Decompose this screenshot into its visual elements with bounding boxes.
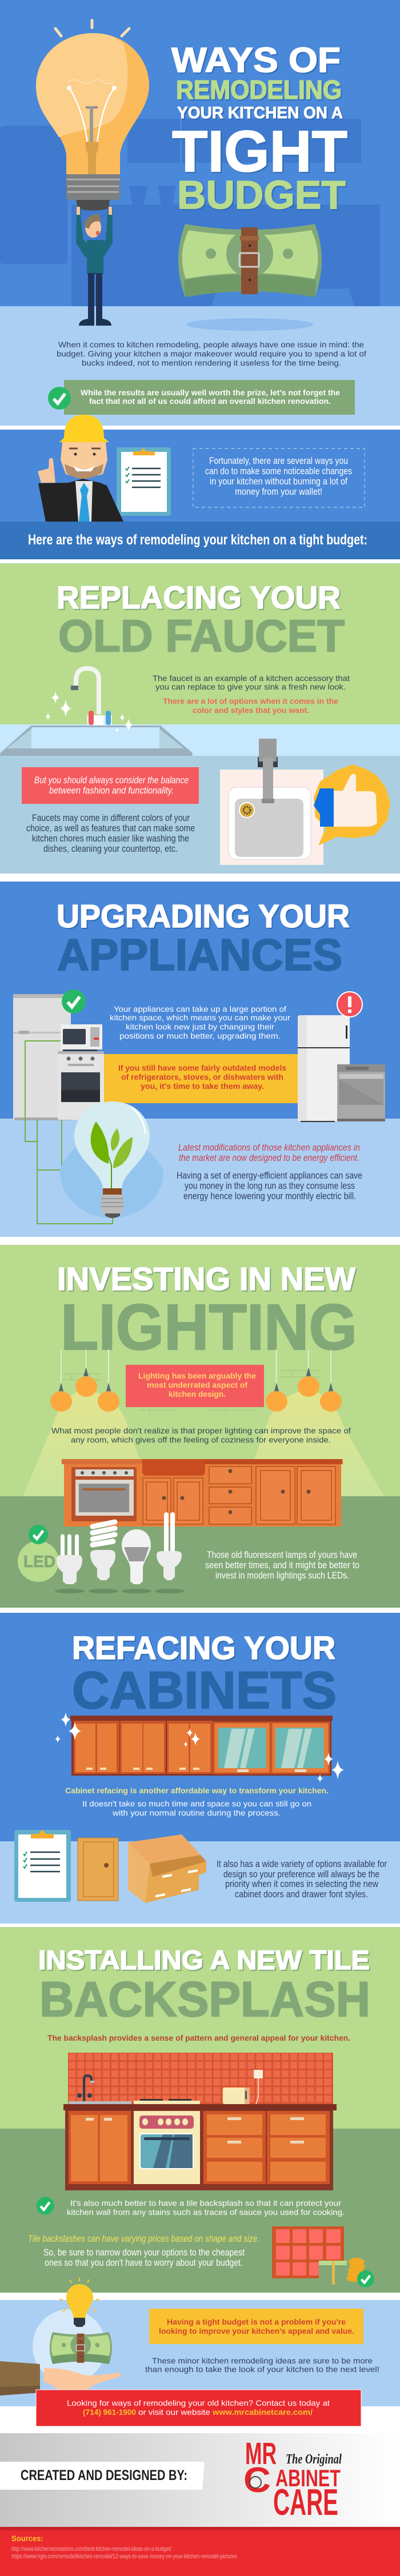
text: design options paragraph: cabinet doors and drawer font styles.: [235, 1889, 368, 1900]
callout: dashed note: in your kitchen without burning a lot of: [210, 476, 347, 487]
text: tile prices paragraph: ones so that you don't have to worry about your budget.: [45, 2258, 243, 2268]
text: LED paragraph: invest in modern lightings such LEDs.: [215, 1571, 349, 1581]
text: faucet paragraph: There are a lot of options when it comes in the: [163, 696, 338, 706]
callout: tight budget note: [149, 2309, 363, 2344]
icon: sparkles: [55, 1712, 344, 1783]
title: YOUR KITCHEN ON A: [177, 104, 343, 122]
heading: investing in new lighting: INVESTING IN NEW: [57, 1261, 355, 1297]
text: lighting paragraph: any room, which gives off the feeling of coziness for everyone inside.: [71, 1435, 331, 1444]
callout: contact box: or visit our website: [138, 2407, 210, 2417]
callout: tight budget note: looking to improve your kitchen's appeal and value.: [159, 2326, 354, 2335]
logo: Mr Cabinet Care: C: [243, 2461, 271, 2500]
icon: construction worker: [38, 415, 123, 522]
icon: top view sink: [220, 739, 323, 865]
icon: lower cabinets: [62, 1459, 343, 1527]
text: intro paragraph: bucks indeed, not to mention rendering it useless for the time being.: [82, 358, 341, 367]
callout: dashed note: Fortunately, there are several ways you: [209, 456, 348, 466]
logo: Mr Cabinet Care: ABINET: [275, 2465, 341, 2491]
callout: underrated lighting note: [126, 1365, 264, 1407]
icon: hand with bulb and money: [0, 2278, 121, 2395]
text: faucet features paragraph: Faucets may come in different colors of your: [32, 813, 190, 823]
text: created and designed by banner: [0, 2462, 205, 2490]
heading: upgrading your appliances: APPLIANCES: [57, 930, 342, 980]
icon: left fridge: [13, 994, 71, 1120]
title: TIGHT: [172, 119, 347, 184]
title: WAYS OF: [171, 41, 341, 79]
logo: Mr Cabinet Care: MR: [245, 2437, 277, 2471]
icon: faucet and sink: [0, 668, 193, 756]
text: faucet features paragraph: [26, 813, 195, 854]
text: conclusion paragraph: [145, 2356, 379, 2374]
icon: green check: [36, 2197, 54, 2215]
title: [171, 41, 347, 217]
text: tile protection paragraph: [67, 2198, 345, 2217]
panel: lighting section background: [0, 1245, 400, 1608]
icon: cabinet door: [78, 1838, 118, 1901]
icon: clipboard: [14, 1830, 71, 1902]
text: faucet features paragraph: kitchen chores much easier like washing the: [32, 834, 189, 844]
text: refacing paragraph: with your normal routine during the process.: [112, 1808, 281, 1817]
text: design options paragraph: priority when it comes in selecting the new: [225, 1879, 378, 1889]
heading: refacing your cabinets: [72, 1630, 337, 1720]
text: tile protection paragraph: It's also much better to have a tile backsplash so that it can protect your: [70, 2198, 341, 2208]
text: intro paragraph: When it comes to kitchen remodeling, people always have one issue in mind: the: [58, 340, 364, 349]
icon: plant in light bulb: [60, 1101, 163, 1218]
text: energy efficient paragraph: you money in the long run as they consume less: [185, 1181, 355, 1191]
text: conclusion paragraph: than enough to take the look of your kitchen to the next level!: [145, 2365, 379, 2374]
text: energy efficient paragraph: the market are now designed to be energy efficient.: [179, 1153, 359, 1163]
heading: refacing your cabinets: REFACING YOUR: [72, 1630, 335, 1666]
callout: green note: While the results are usually well worth the prize, let's not forget the: [81, 388, 340, 397]
text: energy efficient paragraph: Latest modifications of those kitchen appliances in: [178, 1143, 360, 1153]
text: faucet paragraph: color and styles that you want.: [193, 706, 309, 715]
callout: green note: fact that not all of us could afford an overall kitchen renovation.: [89, 396, 331, 406]
icon: light bulb types: [55, 1512, 185, 1593]
panel: lead-in band background: [0, 522, 400, 559]
heading: upgrading your appliances: [57, 898, 350, 980]
text: energy efficient paragraph: energy hence lowering your monthly electric bill.: [183, 1191, 356, 1201]
callout: red fashion note: between fashion and functionality.: [49, 786, 174, 796]
panel: faucet section background: [0, 563, 400, 874]
logo: Mr Cabinet Care: [243, 2437, 342, 2523]
text: faucet paragraph: [153, 674, 350, 715]
text: conclusion paragraph: These minor kitchen remodeling ideas are sure to be more: [152, 2356, 373, 2365]
text: backsplash lead: The backsplash provides a sense of pattern and general appeal for your kitchen.: [47, 2033, 350, 2042]
text: appliances paragraph: kitchen space, which means you can make your: [110, 1013, 290, 1022]
icon: microwave and oven: [58, 1024, 104, 1120]
text: energy efficient paragraph: Having a set of energy-efficient appliances can save: [177, 1171, 362, 1181]
text: tile prices paragraph: So, be sure to narrow down your options to the cheapest: [43, 2248, 245, 2258]
text: LED paragraph: seen better times, and it might be better to: [205, 1560, 359, 1571]
icon: man holding up bulb: [76, 207, 113, 326]
panel: appliances section background: [0, 882, 400, 1237]
panel: backsplash section background: [0, 1927, 400, 2293]
icon: light cones: [23, 1392, 384, 1496]
text: lighting paragraph: What most people don't realize is that proper lighting can improve the space of: [51, 1426, 351, 1435]
text: tile prices paragraph: [28, 2234, 259, 2268]
panel: cabinets section background: [0, 1613, 400, 1924]
icon: LED label with check: [18, 1525, 59, 1582]
icon: green check: [357, 2270, 374, 2287]
panel: intro background: [0, 306, 400, 426]
text: lighting paragraph: [51, 1426, 351, 1444]
text: appliances paragraph: positions or much better, upgrading them.: [119, 1031, 281, 1040]
heading: investing in new lighting: [57, 1261, 357, 1363]
heading: replacing your old faucet: OLD FAUCET: [58, 610, 345, 661]
text: appliances paragraph: kitchen look new just by changing their: [126, 1022, 274, 1031]
callout: underrated lighting note: Lighting has been arguably the: [138, 1371, 256, 1380]
panel: credits background: [0, 2433, 400, 2527]
text: faucet paragraph: you can replace to give your sink a fresh new look.: [155, 682, 346, 691]
heading: installing a new tile backsplash: INSTALLING A NEW TILE: [38, 1945, 370, 1975]
callout: underrated lighting note: most underrated aspect of: [147, 1380, 247, 1389]
text: faucet paragraph: The faucet is an example of a kitchen accessory that: [153, 674, 350, 683]
panel: footer with sources: [0, 2527, 400, 2576]
icon: upper cabinets: [70, 1716, 333, 1776]
title: BUDGET: [177, 173, 346, 217]
callout: outdated models note: If you still have some fairly outdated models: [118, 1063, 286, 1072]
text: refacing paragraph: Cabinet refacing is another affordable way to transform your kitchen.: [65, 1786, 329, 1795]
text: faucet features paragraph: dishes, cleaning your countertop, etc.: [43, 844, 178, 854]
text: LED paragraph: [205, 1550, 359, 1581]
text: appliances paragraph: Your appliances can take up a large portion of: [114, 1004, 286, 1013]
icon: circuit lines: [25, 1041, 113, 1224]
text: intro paragraph: [57, 340, 366, 367]
title: REMODELING: [176, 75, 342, 105]
logo: Mr Cabinet Care: CARE: [273, 2481, 338, 2523]
callout: contact box: [36, 2390, 361, 2426]
callout: red fashion note: But you should always consider the balance: [34, 775, 189, 786]
callout: outdated models note: of refrigerators, stoves, or dishwaters with: [121, 1072, 283, 1081]
text: created and designed by banner: CREATED AND DESIGNED BY:: [21, 2467, 187, 2483]
text: tile prices paragraph: Tile backslashes can have varying prices based on shape and size.: [28, 2234, 259, 2244]
panel: footer with sources: https://www.hgtv.com/remodel/kitchen-remodel/12-ways-to-save-money-on-your-kitchen-remodel-pictures: [11, 2553, 237, 2560]
icon: right fridge and stove: [298, 1015, 385, 1122]
panel: footer with sources: http://www.kitchenrecreations.com/best-kitchen-remodel-ideas-on-a-budget/: [11, 2546, 172, 2553]
text: design options paragraph: [217, 1859, 387, 1900]
heading: investing in new lighting: LIGHTING: [61, 1291, 357, 1363]
logo: Mr Cabinet Care: The Original: [286, 2452, 342, 2467]
text: tile protection paragraph: kitchen wall from any stains such as traces of sauce you used for cooking.: [67, 2208, 345, 2217]
callout: contact box: (714) 961-1900: [83, 2407, 136, 2417]
callout: underrated lighting note: kitchen design.: [169, 1389, 226, 1399]
icon: tile sample with money and coins: [272, 2226, 365, 2285]
callout: red fashion note: [22, 767, 199, 804]
icon: green check on fridge: [62, 989, 86, 1013]
text: faucet features paragraph: choice, as well as features that can make some: [26, 823, 195, 834]
heading: installing a new tile backsplash: BACKSPLASH: [39, 1972, 370, 2027]
icon: green check: [48, 387, 71, 410]
callout: outdated models note: you, it's time to take them away.: [141, 1081, 264, 1091]
callout: dashed note: [193, 448, 365, 507]
icon: kitchen with tile backsplash: [63, 2053, 337, 2190]
text: intro paragraph: budget. Giving your kitchen a major makeover would require you to spend a lot of: [57, 349, 366, 358]
icon: alert badge: [337, 992, 362, 1017]
text: LED paragraph: Those old fluorescent lamps of yours have: [207, 1550, 357, 1560]
text: refacing paragraph: [65, 1786, 329, 1817]
icon: LED label with check: LED: [23, 1553, 55, 1571]
callout: contact box: Looking for ways of remodeling your old kitchen? Contact us today at: [67, 2398, 330, 2407]
callout: tight budget note: Having a tight budget is not a problem if you're: [167, 2317, 346, 2326]
icon: hanging lamps: [50, 1349, 342, 1412]
text: appliances paragraph: [110, 1004, 290, 1040]
text: energy efficient paragraph: [177, 1143, 362, 1201]
heading: replacing your old faucet: REPLACING YOUR: [57, 579, 341, 615]
heading: installing a new tile backsplash: [38, 1945, 370, 2027]
heading: refacing your cabinets: CABINETS: [72, 1661, 337, 1720]
icon: clipboard with checklist: [117, 447, 171, 516]
callout: contact box: www.mrcabinetcare.com/: [212, 2407, 313, 2417]
icon: money with belt: [178, 224, 322, 297]
panel: hero background: [0, 0, 400, 306]
callout: green note: [64, 380, 355, 415]
callout: outdated models note: [104, 1054, 298, 1103]
callout: dashed note: money from your wallet!: [235, 487, 322, 497]
callout: dashed note: can do to make some noticeable changes: [205, 466, 352, 476]
heading: replacing your old faucet: [57, 579, 345, 661]
icon: light bulb: [36, 19, 149, 210]
heading: upgrading your appliances: UPGRADING YOUR: [57, 898, 350, 935]
icon: money shadow: [186, 318, 313, 331]
text: refacing paragraph: It doesn't take so much time and space so you can still go on: [82, 1799, 311, 1808]
icon: thumbs up badge: [314, 764, 390, 846]
panel: conclusion background: [0, 2300, 400, 2406]
panel: worker band background: [0, 430, 400, 522]
panel: footer with sources: Sources:: [11, 2534, 43, 2543]
icon: drawer fronts: [128, 1834, 206, 1903]
